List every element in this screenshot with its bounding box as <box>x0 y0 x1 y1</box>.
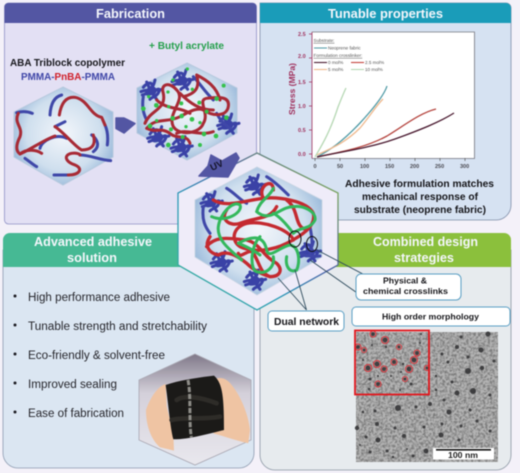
chart: stress versus strain <box>287 32 474 170</box>
advanced adhesive header <box>3 233 200 267</box>
callout: physical and chemical crosslinks: Physical & <box>383 276 427 286</box>
central hexagon: dual network <box>178 153 338 310</box>
chart caption <box>345 178 494 216</box>
curve: neoprene fabric <box>317 86 387 157</box>
chart caption: substrate (neoprene fabric) <box>354 204 486 216</box>
advanced header title: Advanced adhesive <box>34 235 152 249</box>
callout: dual network: Dual network <box>274 317 339 328</box>
bullet list <box>14 292 207 420</box>
chart legend: Neoprene fabric <box>328 46 361 50</box>
combined header title: Combined design <box>373 235 478 249</box>
scale bar <box>433 448 494 460</box>
arrow: to butyl acrylate mixture <box>116 118 135 133</box>
bullet list: High performance adhesive <box>28 292 170 304</box>
hexagon: copolymer with monomer <box>137 63 239 160</box>
fabrication header <box>4 3 256 23</box>
TEM micrograph <box>355 330 498 462</box>
chart legend: Substrate: <box>314 38 334 43</box>
y axis ticks: 1.5 <box>298 80 306 86</box>
y axis title: Stress (MPa) <box>287 63 297 115</box>
x axis ticks: 150 <box>385 164 394 170</box>
x axis ticks: 300 <box>460 164 469 170</box>
y axis ticks: 1.0 <box>298 104 306 110</box>
tunable properties header: Tunable properties <box>328 7 443 21</box>
combined header title <box>373 235 478 265</box>
marker: chemical crosslink circle <box>306 236 318 252</box>
UV label: UV <box>209 158 226 174</box>
chart legend: 0 mol% <box>328 60 343 65</box>
curve: 0 mol% <box>317 113 454 157</box>
chart legend: 2.5 mol% <box>365 60 384 65</box>
x axis ticks: 200 <box>410 164 419 170</box>
chart legend: 10 mol% <box>365 67 383 72</box>
label: butyl acrylate: + Butyl acrylate <box>149 41 224 52</box>
y axis ticks: 0.0 <box>298 152 306 158</box>
curve: 5 mol% <box>317 99 383 155</box>
advanced header title: solution <box>67 251 117 265</box>
x axis ticks: 0 <box>314 164 317 170</box>
panel: advanced adhesive solution <box>3 233 254 468</box>
scale bar: 100 nm <box>448 451 478 460</box>
advanced header title <box>34 235 152 265</box>
callout: high order morphology: High order morphology <box>382 312 479 322</box>
chart legend: Formulation crosslinker: <box>314 53 362 58</box>
label: ABA triblock copolymer: ABA Triblock copolymer <box>10 58 125 69</box>
curve: 2.5 mol% <box>317 109 436 157</box>
bullet list: Improved sealing <box>28 379 117 391</box>
arrow: UV curing <box>199 153 239 177</box>
curve: 10 mol% <box>315 88 346 157</box>
bullet list: Tunable strength and stretchability <box>28 321 207 333</box>
chart caption: mechanical response of <box>362 191 478 203</box>
callout: high order morphology <box>352 307 510 326</box>
x axis ticks <box>314 164 469 170</box>
x axis ticks: 250 <box>435 164 444 170</box>
photo: hands stretching adhesive fabric <box>139 354 251 465</box>
x axis ticks: 50 <box>337 164 343 170</box>
red inset box <box>355 330 430 394</box>
y axis ticks <box>298 32 306 158</box>
combined design header <box>320 233 511 267</box>
panel: fabrication <box>4 3 256 224</box>
bullet list: Eco-friendly & solvent-free <box>28 350 165 362</box>
callout: dual network <box>268 311 344 331</box>
chart caption: Adhesive formulation matches <box>345 178 494 190</box>
y axis ticks: 2.5 <box>298 32 306 38</box>
fabrication header: Fabrication <box>96 7 165 21</box>
chart legend: 5 mol% <box>328 67 343 72</box>
combined header title: strategies <box>394 251 454 265</box>
panel: combined design strategies <box>260 233 511 470</box>
chart legend <box>314 38 384 72</box>
bullet list: Ease of fabrication <box>28 408 124 420</box>
y axis ticks: 0.5 <box>298 128 306 134</box>
x axis ticks: 100 <box>360 164 369 170</box>
y axis ticks: 2.0 <box>298 54 306 60</box>
label: PMMA-PnBA-PMMA: PMMA-PnBA-PMMA <box>21 72 115 83</box>
tunable properties header <box>260 3 511 23</box>
callout: physical and chemical crosslinks <box>356 274 461 300</box>
callout leader lines <box>278 250 412 310</box>
callout: physical and chemical crosslinks: chemical crosslinks <box>363 286 448 296</box>
marker: physical crosslink circle <box>289 231 301 247</box>
hexagon: triblock copolymer <box>14 87 113 185</box>
panel: tunable properties <box>260 3 511 220</box>
